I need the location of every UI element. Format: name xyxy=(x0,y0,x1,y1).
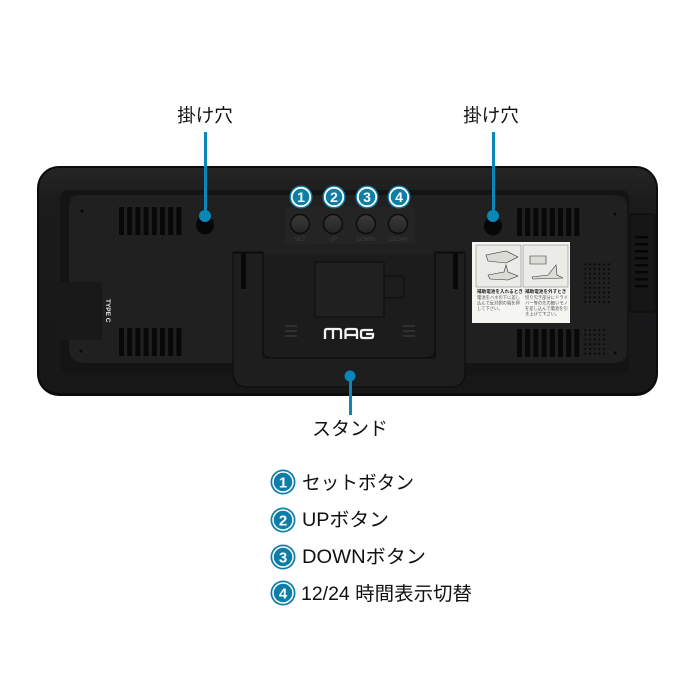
legend item 4: 4 xyxy=(279,586,288,602)
legend item 1: セットボタン xyxy=(302,472,414,494)
clock body xyxy=(37,166,658,396)
left cable notch xyxy=(60,283,102,340)
numbered markers on buttons: 4 xyxy=(395,189,403,205)
button panel xyxy=(285,207,415,244)
instruction sticker: き上げて下さい。 xyxy=(525,310,559,318)
legend item 2: UPボタン xyxy=(302,509,389,531)
vent grilles xyxy=(119,207,579,357)
instruction sticker: 補助電池を入れるとき xyxy=(477,288,523,295)
button panel: 12/24H xyxy=(388,237,408,243)
numbered markers on buttons: 1 xyxy=(297,189,305,205)
legend item 1 xyxy=(270,470,414,494)
heading: hanging hole left: 掛け穴 xyxy=(177,105,233,126)
battery cover xyxy=(315,262,384,317)
legend item 3 xyxy=(270,544,426,570)
type c label: TYPE C xyxy=(104,299,111,323)
button panel: DOWN xyxy=(356,237,376,243)
screws xyxy=(79,209,617,355)
instruction sticker: して下さい。 xyxy=(477,305,503,312)
button panel: SET xyxy=(294,237,306,243)
legend item 1: 1 xyxy=(279,474,287,492)
right side connector xyxy=(630,214,655,312)
button panel: UP xyxy=(329,237,337,243)
numbered markers on buttons: 3 xyxy=(363,189,371,205)
instruction sticker: 込んで反対側の端を押 xyxy=(477,300,520,306)
instruction sticker: を差し込んで電池を引 xyxy=(525,305,568,312)
instruction sticker: バー等の先の細いモノ xyxy=(525,300,568,306)
speaker dots xyxy=(583,262,612,357)
button 2 xyxy=(324,214,342,234)
legend item 3: DOWNボタン xyxy=(302,546,426,568)
button 4 xyxy=(388,214,408,234)
instruction sticker: 切り欠き部分にドライ xyxy=(525,294,568,301)
instruction sticker xyxy=(472,242,570,323)
legend item 3: 3 xyxy=(279,550,287,566)
hanging hole right xyxy=(484,132,502,236)
button 3 xyxy=(356,214,376,234)
stand pointer xyxy=(344,370,356,415)
numbered markers on buttons: 2 xyxy=(330,189,338,205)
legend item 2: 2 xyxy=(279,512,287,530)
MAG logo xyxy=(325,329,373,339)
legend xyxy=(270,470,472,606)
button 1 xyxy=(290,214,310,234)
legend item 4 xyxy=(270,580,472,606)
recessed back panel xyxy=(60,190,629,375)
heading: stand: スタンド xyxy=(312,418,388,440)
legend item 4: 12/24 時間表示切替 xyxy=(301,583,472,605)
instruction sticker: 補助電池を外すとき xyxy=(525,288,566,295)
heading: hanging hole right: 掛け穴 xyxy=(463,105,519,126)
stand xyxy=(233,252,465,387)
hanging hole left xyxy=(196,132,214,234)
numbered markers on buttons xyxy=(290,186,410,208)
instruction sticker: 電池をバネの下に差し xyxy=(477,294,520,301)
legend item 2 xyxy=(270,508,389,532)
